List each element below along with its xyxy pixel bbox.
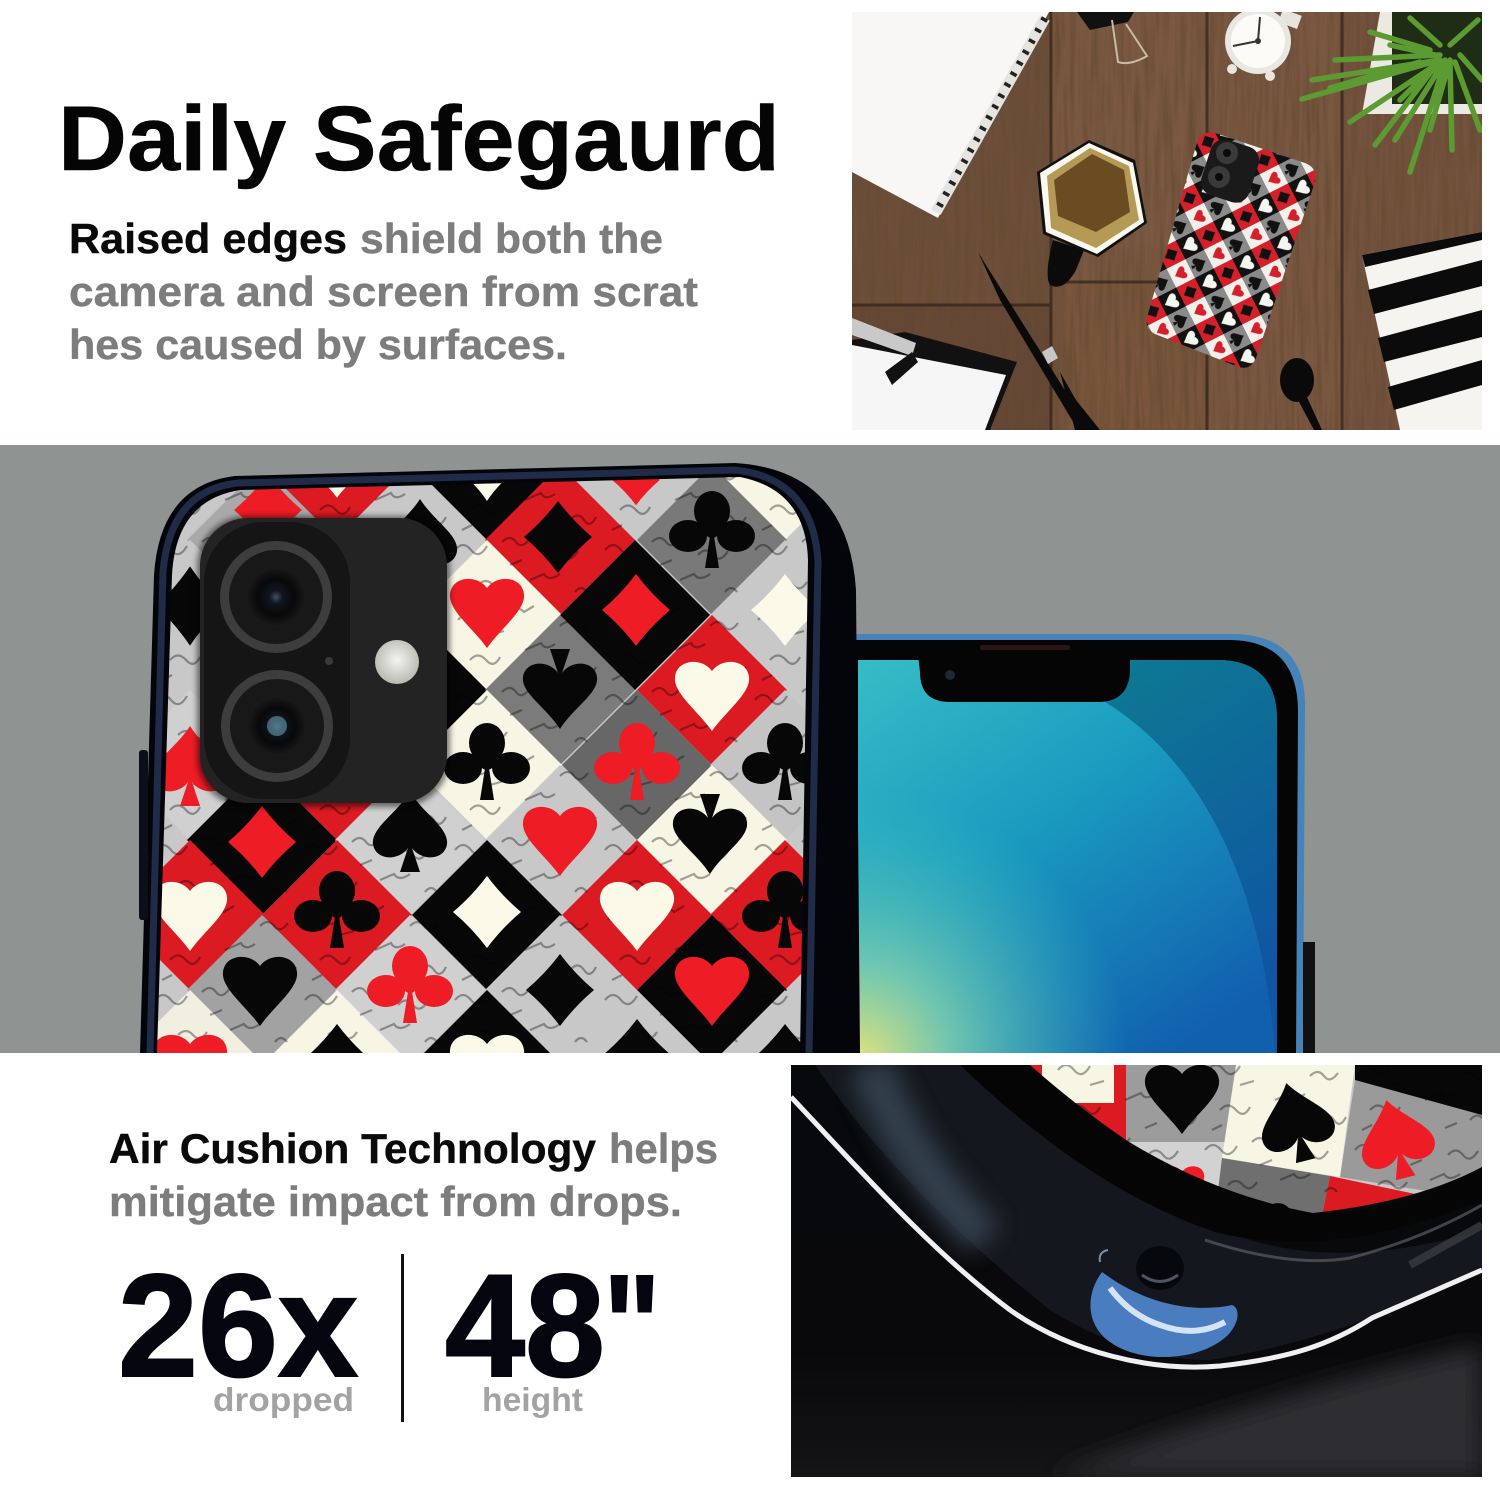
camera module (197, 516, 450, 807)
black bezel (850, 640, 1298, 1053)
blue phone frame (850, 634, 1305, 1053)
black case (140, 463, 860, 1053)
stat: 48 inch height: height (482, 1381, 583, 1418)
text block: raised edges description: camera and screen from scrat (69, 268, 698, 315)
clubs (669, 491, 755, 568)
photo: desk flat lay with phone case (852, 8, 1482, 430)
stat divider (401, 1254, 404, 1422)
text block: air cushion description: Air Cushion Technology (109, 1125, 597, 1172)
case art (1030, 1065, 1482, 1213)
grey band (0, 445, 1500, 1053)
text block: air cushion description (109, 1125, 718, 1225)
text block: raised edges description: hes caused by surfaces. (69, 321, 567, 368)
striped notebook (1362, 232, 1482, 430)
text block: air cushion description: mitigate impact from drops. (109, 1178, 682, 1225)
text block: raised edges description (69, 215, 698, 368)
plant in white pot (1302, 12, 1482, 172)
earbud (1280, 358, 1322, 430)
text block: air cushion description: helps (609, 1125, 718, 1172)
front camera (945, 670, 955, 680)
speaker (980, 645, 1070, 650)
alarm clock (1225, 8, 1302, 81)
bumper body tone (815, 1065, 1482, 1360)
clipboard (852, 318, 1017, 430)
stat: 26x dropped: 26x (118, 1244, 358, 1407)
spades (523, 649, 597, 729)
stat: 48 inch height: 48 (445, 1244, 605, 1407)
flash (375, 640, 419, 684)
handwriting texture (150, 470, 820, 1060)
notch (918, 655, 1130, 702)
title: Daily Safegaurd (58, 88, 780, 190)
text block: raised edges description: shield both the (360, 215, 663, 262)
rim highlights (1205, 1205, 1482, 1261)
screen wallpaper (858, 660, 1277, 1053)
navy bumper (150, 470, 818, 1053)
inner black band (960, 1065, 1246, 1238)
air cushion bubble (1090, 1246, 1238, 1357)
lower right grey sheen (1050, 1345, 1482, 1477)
screen-side phone (850, 634, 1315, 1053)
binder clip (1077, 12, 1147, 63)
pen (978, 252, 1100, 430)
hearts (450, 579, 524, 648)
notebook (852, 12, 1049, 218)
mini camera (1201, 140, 1260, 203)
diamonds (602, 574, 670, 646)
lower lens (221, 670, 333, 782)
photo: air cushion corner close-up (791, 1065, 1482, 1477)
playing card pattern (157, 477, 808, 1053)
microphone (325, 657, 333, 665)
stat: 48 inch height: " (603, 1244, 661, 1407)
side button (139, 750, 148, 920)
white edge highlight (791, 1097, 1482, 1367)
text block: raised edges description: Raised edges (69, 215, 347, 262)
case-side phone (139, 463, 860, 1054)
coffee mug (1037, 140, 1147, 287)
upper lens (220, 541, 332, 653)
bumper body sheen (870, 1065, 985, 1240)
stat: 26x dropped: dropped (213, 1381, 354, 1418)
mini phone case (1146, 132, 1316, 368)
